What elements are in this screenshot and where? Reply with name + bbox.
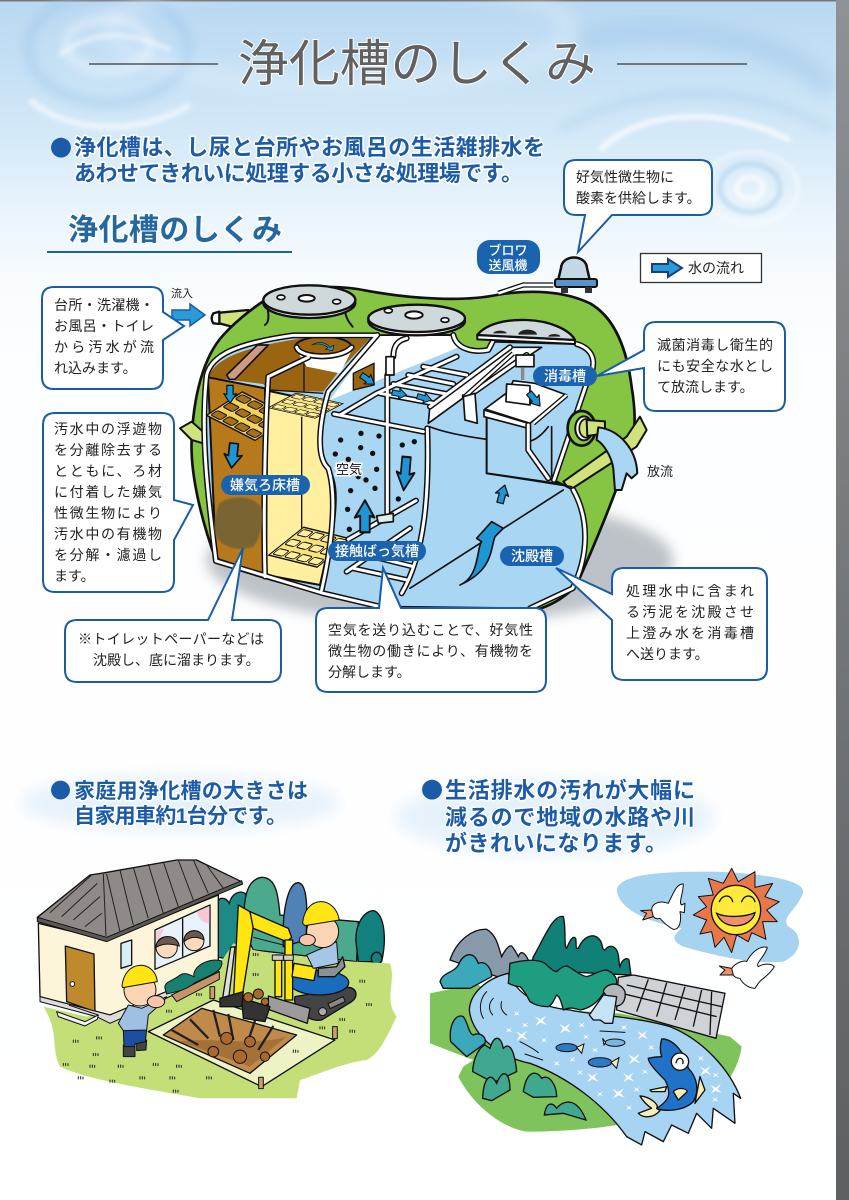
illustration: clean river <box>430 868 803 1145</box>
heading: cleaner rivers: 減るので地域の水路や川 <box>445 805 695 830</box>
excavator arm <box>222 905 317 1003</box>
callout: disinfection: て放流します。 <box>657 379 754 395</box>
white deck <box>428 347 542 423</box>
label pill: blower: ブロワ <box>488 243 528 258</box>
mountains <box>450 916 631 980</box>
supervisor <box>118 965 167 1057</box>
brown inlet baffle <box>353 363 374 390</box>
flow arrows <box>223 342 545 585</box>
inlet pipe <box>212 310 253 328</box>
big fish <box>638 1039 705 1117</box>
callout: aeration: 微生物の働きにより、有機物を <box>328 643 533 659</box>
callout: settling: へ送ります。 <box>626 646 709 662</box>
ground shadow <box>207 497 673 623</box>
label pill: aeration tank: 接触ばっ気槽 <box>335 543 419 559</box>
heading: tank size: 家庭用浄化槽の大きさは <box>74 780 308 803</box>
callout: inlet: れ込みます。 <box>54 360 137 376</box>
heading: cleaner rivers: 生活排水の汚れが大幅に <box>445 778 695 803</box>
outflow label: 放流 <box>647 464 673 479</box>
steps <box>57 1005 98 1026</box>
callout: toilet paper note: ※トイレットペーパーなどは <box>78 631 264 647</box>
callout: toilet paper note <box>65 548 281 682</box>
label pill: disinfection tank <box>533 366 597 386</box>
callout: disinfection: 滅菌消毒し衛生的 <box>657 337 773 353</box>
pipe and discharge <box>589 984 625 1023</box>
lid 1 <box>263 285 355 327</box>
label pill: settling tank <box>500 546 564 566</box>
top scan edge <box>0 0 849 2</box>
grass <box>430 983 742 1132</box>
tank lines <box>410 427 572 588</box>
callout: settling: 処理水中に含まれ <box>626 583 754 599</box>
discharged water <box>597 427 637 490</box>
callout: anaerobic filter: ます。 <box>54 568 95 584</box>
diagram: septic tank cutaway <box>180 285 673 623</box>
callout: blower <box>564 160 712 252</box>
bucket with soil <box>220 989 270 1022</box>
legend: water flow: 水の流れ <box>688 260 744 276</box>
bird left beak <box>641 910 653 920</box>
label pill: blower: 送風機 <box>488 258 528 273</box>
excavator seat <box>318 957 345 977</box>
legend: water flow <box>640 254 762 282</box>
lid 3 <box>477 320 575 344</box>
heading: cleaner rivers <box>395 773 715 856</box>
big window with family <box>155 905 210 969</box>
white hatch ring <box>295 347 353 373</box>
stakes <box>210 987 337 1089</box>
callout: anaerobic filter: 汚水中の浮遊物 <box>54 421 162 437</box>
cutaway interior <box>204 335 593 608</box>
callout: settling: る汚泥を沈殿させ <box>626 604 754 620</box>
callout: anaerobic filter: 汚水中の有機物 <box>54 526 162 542</box>
water ripples <box>28 0 830 224</box>
excavator blade <box>268 996 310 1023</box>
tank body <box>192 287 635 615</box>
callout: aeration <box>316 568 546 692</box>
callout: aeration: 空気を送り込むことで、好気性 <box>328 622 533 638</box>
right page edge <box>836 0 849 1200</box>
inflow arrow <box>172 304 205 326</box>
white tubes <box>204 335 593 608</box>
heading: cleaner rivers: ● <box>421 773 443 805</box>
callout: toilet paper note: 沈殿し、底に溜まります。 <box>93 652 260 668</box>
excavation site <box>148 1000 335 1087</box>
sparkles <box>506 1011 722 1110</box>
heading: tank size <box>20 775 340 831</box>
ripple lines <box>480 992 625 1060</box>
pit <box>163 1008 297 1073</box>
label: air: 空気 <box>336 462 362 477</box>
river <box>469 973 741 1145</box>
sludge <box>215 497 262 549</box>
left brown chamber <box>208 377 265 575</box>
hatch <box>295 337 352 358</box>
callout: anaerobic filter <box>43 413 193 592</box>
label pill: disinfection tank: 消毒槽 <box>544 368 586 384</box>
air bubbles <box>333 431 417 532</box>
tray lip <box>484 410 528 428</box>
diffuser joint <box>377 513 393 523</box>
operator <box>299 902 339 968</box>
side ribs <box>180 422 205 443</box>
sky patches <box>617 872 803 962</box>
house wall <box>38 895 218 1015</box>
callout: anaerobic filter: に付着した嫌気 <box>54 484 162 500</box>
sheet-pile wall <box>617 975 725 1038</box>
label pill: settling tank: 沈殿槽 <box>511 548 553 564</box>
callout: disinfection: にも安全な水とし <box>657 358 773 374</box>
inflow label: 流入 <box>171 287 193 300</box>
callout: settling: 上澄み水を消毒槽 <box>626 625 754 641</box>
excavator track <box>295 987 356 1020</box>
valves <box>386 355 534 423</box>
roof <box>37 860 243 942</box>
grass tufts <box>63 953 371 1092</box>
callout: anaerobic filter: を分離除去する <box>54 442 162 458</box>
callout: disinfection <box>597 322 785 411</box>
lead text: 浄化槽は、し尿と台所やお風呂の生活雑排水を <box>74 135 545 160</box>
lead text <box>50 131 545 186</box>
small window <box>121 940 132 968</box>
title: 浄化槽のしくみ <box>238 36 596 92</box>
heading: tank size: 自家用車約1台分です。 <box>74 805 287 828</box>
disinfect tank box <box>487 417 560 484</box>
door <box>65 946 95 1012</box>
upper partition <box>270 363 323 393</box>
callout: blower: 好気性微生物に <box>576 169 674 185</box>
lead text: ● <box>50 131 72 163</box>
callout: inlet: お風呂・トイレ <box>54 318 154 334</box>
callout: anaerobic filter: とともに、ろ材 <box>54 463 162 479</box>
callout: blower: 酸素を供給します。 <box>576 190 701 206</box>
callout: inlet: 台所・洗濯機・ <box>54 297 154 313</box>
bird right beak <box>719 966 733 975</box>
yellow chamber <box>266 391 336 585</box>
illustration: house and excavator <box>37 860 397 1098</box>
heading: cleaner rivers: がきれいになります。 <box>445 831 667 856</box>
excavator body <box>290 970 349 995</box>
lid 2 <box>368 305 465 335</box>
heading: tank size: ● <box>50 775 71 805</box>
label pill: anaerobic filter: 嫌気ろ床槽 <box>230 477 300 493</box>
lattice: lower yellow <box>269 527 352 567</box>
left bushes <box>440 955 586 1120</box>
outlet pipe <box>568 411 605 446</box>
section heading: 浄化槽のしくみ <box>68 214 282 247</box>
lawn <box>43 943 397 1098</box>
sun <box>693 868 779 953</box>
callout: anaerobic filter: を分解・濾過し <box>54 547 162 563</box>
disinfect deck rail <box>464 353 567 423</box>
label pill: blower <box>477 240 540 274</box>
blower icon <box>555 258 597 293</box>
pink pipe <box>227 345 268 379</box>
bird right <box>732 947 774 988</box>
foundation <box>40 970 218 1023</box>
callout: anaerobic filter: 性微生物により <box>54 505 162 521</box>
callout: settling <box>556 568 767 680</box>
callout: aeration: 分解します。 <box>328 664 411 680</box>
lattice: upper yellow <box>268 393 343 418</box>
disinfect tray <box>485 381 567 423</box>
trees <box>211 877 384 964</box>
lead text: あわせてきれいに処理する小さな処理場です。 <box>74 161 523 186</box>
forest bush <box>508 960 620 1010</box>
small fish <box>556 1038 625 1068</box>
label pill: aeration tank <box>328 541 426 561</box>
hedge planters <box>165 960 222 1002</box>
blower pipe <box>498 285 553 293</box>
white wedge under lid <box>330 336 459 400</box>
callout: inlet <box>42 287 184 389</box>
top brown chamber <box>208 339 370 392</box>
bird left <box>652 884 685 929</box>
label pill: anaerobic filter <box>221 475 310 495</box>
lattice: brown chamber <box>207 392 291 440</box>
callout: inlet: から汚水が流 <box>54 339 154 355</box>
